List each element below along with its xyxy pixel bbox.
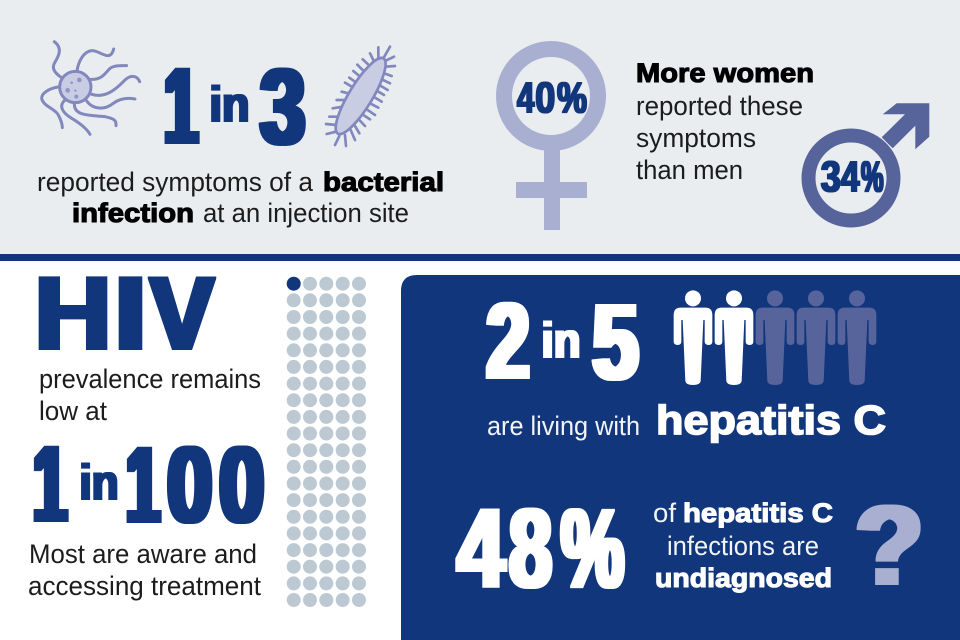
text: undiagnosed infections: hepatitis C (683, 498, 833, 528)
text: more women: symptoms (636, 123, 756, 153)
icon: five people, two highlighted (674, 290, 876, 385)
divider band (0, 254, 960, 261)
stat: 2 in 5: 2 (486, 280, 530, 401)
stat: 1 in 3: in (210, 76, 250, 132)
stat: 2 in 5: 5 (592, 281, 638, 402)
text: more women: reported these (636, 91, 803, 121)
icon: female symbol with 40%: 4 (517, 74, 535, 122)
text: bacterial infection caption (37, 167, 444, 228)
stat: 1 in 3 (164, 45, 305, 167)
text: prevalence: low at (39, 396, 107, 426)
text: undiagnosed infections: infections are (667, 531, 819, 561)
icon: rod bacterium with spikes (326, 47, 395, 146)
panel: hepatitis C (401, 275, 960, 640)
text: undiagnosed infections: of (653, 498, 676, 528)
icon: female symbol with 40%: % (557, 74, 587, 122)
stat: 48%: 4 (457, 486, 505, 611)
stat: 1 in 100: 1 (33, 423, 67, 544)
text: bacterial infection caption: reported symptoms of a (37, 167, 314, 197)
stat: 48%: % (561, 486, 624, 611)
text: prevalence (39, 364, 261, 426)
stat: 48% (457, 486, 624, 611)
stat: 1 in 3: 1 (164, 45, 198, 166)
panel: top background (0, 0, 960, 254)
stat: 1 in 100 (33, 423, 264, 545)
heading: HIV (34, 256, 214, 372)
icon: round bacterium with flagella (42, 42, 140, 134)
stat: 1 in 3: 3 (260, 46, 305, 167)
stat: 2 in 5: in (542, 312, 580, 368)
icon: female symbol with 40%: 0 (535, 74, 555, 122)
text: aware and accessing treatment (28, 539, 261, 601)
icon: female symbol with 40% (504, 49, 598, 230)
text: aware and accessing treatment: Most are aware and (29, 539, 257, 569)
text: more women (636, 58, 814, 185)
heading: HIV: V (150, 256, 214, 372)
icon: male symbol with 34%: 4 (841, 152, 860, 202)
icon: question mark: ? (856, 483, 923, 608)
heading: HIV: I (114, 256, 148, 372)
text: are living with hepatitis C: hepatitis C (656, 397, 886, 443)
text: prevalence: prevalence remains (39, 364, 261, 394)
text: more women: than men (636, 155, 743, 185)
text: aware and accessing treatment: accessing treatment (28, 571, 261, 601)
text: bacterial infection caption: at an injection site (203, 198, 409, 228)
stat: 1 in 100: 1 (126, 424, 160, 545)
stat: 1 in 100: 0 (167, 424, 212, 545)
icon: male symbol with 34% (808, 103, 929, 220)
stat: 1 in 100: in (80, 454, 118, 510)
icon: male symbol with 34%: % (861, 152, 884, 202)
text: undiagnosed infections: undiagnosed (655, 563, 832, 593)
text: are living with hepatitis C (487, 397, 886, 443)
stat: 2 in 5 (486, 280, 638, 402)
heading: HIV: H (34, 256, 112, 372)
text: undiagnosed infections (653, 498, 833, 593)
icon: male symbol with 34%: 3 (821, 152, 841, 202)
text: bacterial infection caption: infection (72, 198, 194, 228)
text: are living with hepatitis C: are living with (487, 411, 640, 441)
stat: 1 in 100: 0 (219, 424, 264, 545)
stat: 48%: 8 (509, 486, 552, 611)
text: more women: More women (636, 58, 814, 88)
chart: 1 in 100 dot matrix (287, 277, 366, 607)
text: bacterial infection caption: bacterial (323, 167, 444, 197)
